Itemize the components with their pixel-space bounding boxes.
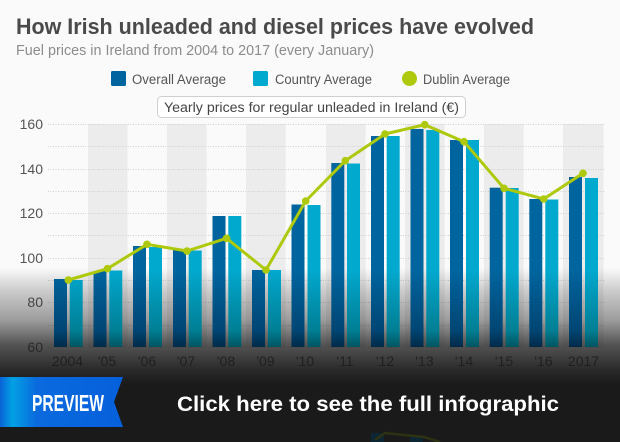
bars: overall average bbox=[54, 129, 582, 347]
y axis labels bbox=[20, 116, 43, 355]
x axis labels bbox=[52, 353, 599, 369]
x axis labels: '14 bbox=[455, 353, 473, 369]
x axis labels: '13 bbox=[415, 353, 434, 369]
x axis labels: '07 bbox=[177, 353, 195, 369]
x axis labels: '05 bbox=[98, 353, 116, 369]
bars: country average bbox=[70, 130, 598, 347]
x axis labels: '09 bbox=[256, 353, 275, 369]
call to action: Click here to see the full infographic bbox=[177, 392, 559, 416]
preview ribbon bbox=[0, 377, 123, 427]
x axis labels: '15 bbox=[495, 353, 513, 369]
legend: country average: Country Average bbox=[275, 72, 372, 87]
y axis labels: 140 bbox=[20, 161, 43, 177]
legend: dublin average: Dublin Average bbox=[423, 72, 510, 87]
x axis labels: '12 bbox=[376, 353, 394, 369]
chart caption: Yearly prices for regular unleaded in Ireland (€) bbox=[164, 100, 459, 115]
x axis labels: 2017 bbox=[568, 353, 599, 369]
y axis labels: 80 bbox=[27, 294, 43, 310]
y axis labels: 160 bbox=[20, 116, 43, 132]
title: How Irish unleaded and diesel prices have evolved bbox=[16, 14, 534, 39]
y axis labels: 120 bbox=[20, 205, 43, 221]
x axis labels: '08 bbox=[217, 353, 235, 369]
grid lines bbox=[48, 124, 604, 348]
legend bbox=[111, 71, 510, 87]
subtitle: Fuel prices in Ireland from 2004 to 2017 (every January) bbox=[16, 43, 374, 59]
x axis labels: '16 bbox=[534, 353, 553, 369]
legend: overall average: Overall Average bbox=[132, 72, 226, 87]
y axis labels: 100 bbox=[20, 250, 43, 266]
alternating year bands bbox=[88, 124, 604, 347]
faint chart ghost under the overlay bbox=[371, 433, 440, 442]
dark fade overlay bbox=[0, 268, 620, 442]
chart caption bbox=[158, 96, 466, 118]
x axis labels: '06 bbox=[138, 353, 156, 369]
y axis labels: 60 bbox=[27, 339, 43, 355]
x axis labels: 2004 bbox=[52, 353, 83, 369]
x axis labels: '10 bbox=[296, 353, 314, 369]
line: dublin average bbox=[64, 121, 587, 284]
x axis labels: '11 bbox=[336, 353, 354, 369]
preview ribbon: PREVIEW bbox=[32, 390, 104, 416]
